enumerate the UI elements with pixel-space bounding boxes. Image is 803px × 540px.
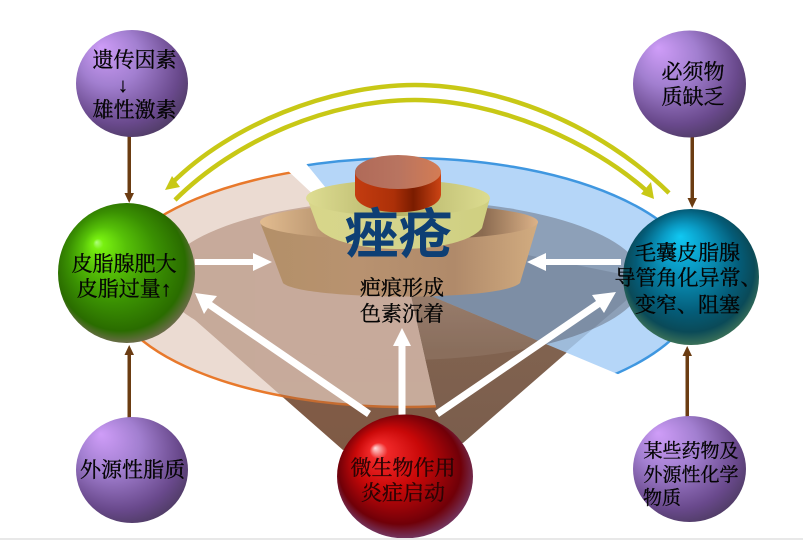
text: scar formation and pigmentation: 色素沉着 xyxy=(360,302,444,326)
sphere: microbial action xyxy=(337,414,473,538)
sphere: drugs and exogenous chemicals: 某些药物及 xyxy=(643,440,739,462)
text: scar formation and pigmentation: 疤痕形成 xyxy=(360,276,444,300)
arrow: white red sphere to cone text xyxy=(393,328,411,416)
arrow: yellow arc to left sphere xyxy=(165,85,669,193)
sphere: sebaceous gland hypertrophy xyxy=(58,203,195,343)
sphere: follicle duct keratinization xyxy=(614,209,762,345)
title: acne: 痤疮 xyxy=(344,205,452,265)
sphere: sebaceous gland hypertrophy: 皮脂腺肥大 xyxy=(72,252,176,276)
sphere: exogenous lipids: 外源性脂质 xyxy=(80,458,185,482)
sphere: exogenous lipids xyxy=(76,417,188,523)
sphere: genetic factors: 雄性激素 xyxy=(92,98,176,122)
arrow: brown bottom left xyxy=(124,345,134,418)
sphere: follicle duct keratinization: 导管角化异常、 xyxy=(614,266,762,290)
sphere: drugs and exogenous chemicals: 外源性化学 xyxy=(643,464,739,486)
arrow: white green sphere to cone xyxy=(195,253,272,271)
arrow: white red sphere to green sphere xyxy=(195,293,371,417)
sphere: microbial action: 炎症启动 xyxy=(361,481,445,505)
sphere: sebaceous gland hypertrophy: 皮脂过量↑ xyxy=(77,277,171,301)
top red cylinder xyxy=(355,155,441,212)
arrow: white teal sphere to cone xyxy=(527,253,621,271)
sphere: genetic factors xyxy=(76,30,188,137)
sphere: drugs and exogenous chemicals xyxy=(633,416,746,522)
arrow: yellow arc to right sphere xyxy=(175,100,654,200)
sphere: essential nutrient deficiency: 必须物 xyxy=(662,60,724,84)
sphere: essential nutrient deficiency: 质缺乏 xyxy=(662,85,724,109)
arrow: brown top left xyxy=(124,136,134,203)
panel: orange sector xyxy=(141,172,436,450)
sphere: genetic factors: 遗传因素 xyxy=(92,48,176,72)
brown cone shadow wedge xyxy=(282,296,567,450)
lower tan cone xyxy=(260,204,538,297)
sphere: genetic factors: ↓ xyxy=(118,75,128,97)
arrow: brown top right xyxy=(688,136,697,208)
arrow: brown bottom right xyxy=(682,346,692,417)
bottom strip xyxy=(0,538,803,540)
sphere: microbial action: 微生物作用 xyxy=(350,456,456,480)
sphere: essential nutrient deficiency xyxy=(633,30,746,138)
panel: blue sector xyxy=(306,156,671,374)
sphere: drugs and exogenous chemicals: 物质 xyxy=(643,487,681,509)
text: scar formation and pigmentation xyxy=(360,276,444,326)
middle yellow cone xyxy=(306,180,490,249)
arrow: white red sphere to teal sphere xyxy=(435,292,616,417)
sphere: follicle duct keratinization: 变窄、阻塞 xyxy=(635,293,740,317)
sphere: follicle duct keratinization: 毛囊皮脂腺 xyxy=(635,241,740,265)
